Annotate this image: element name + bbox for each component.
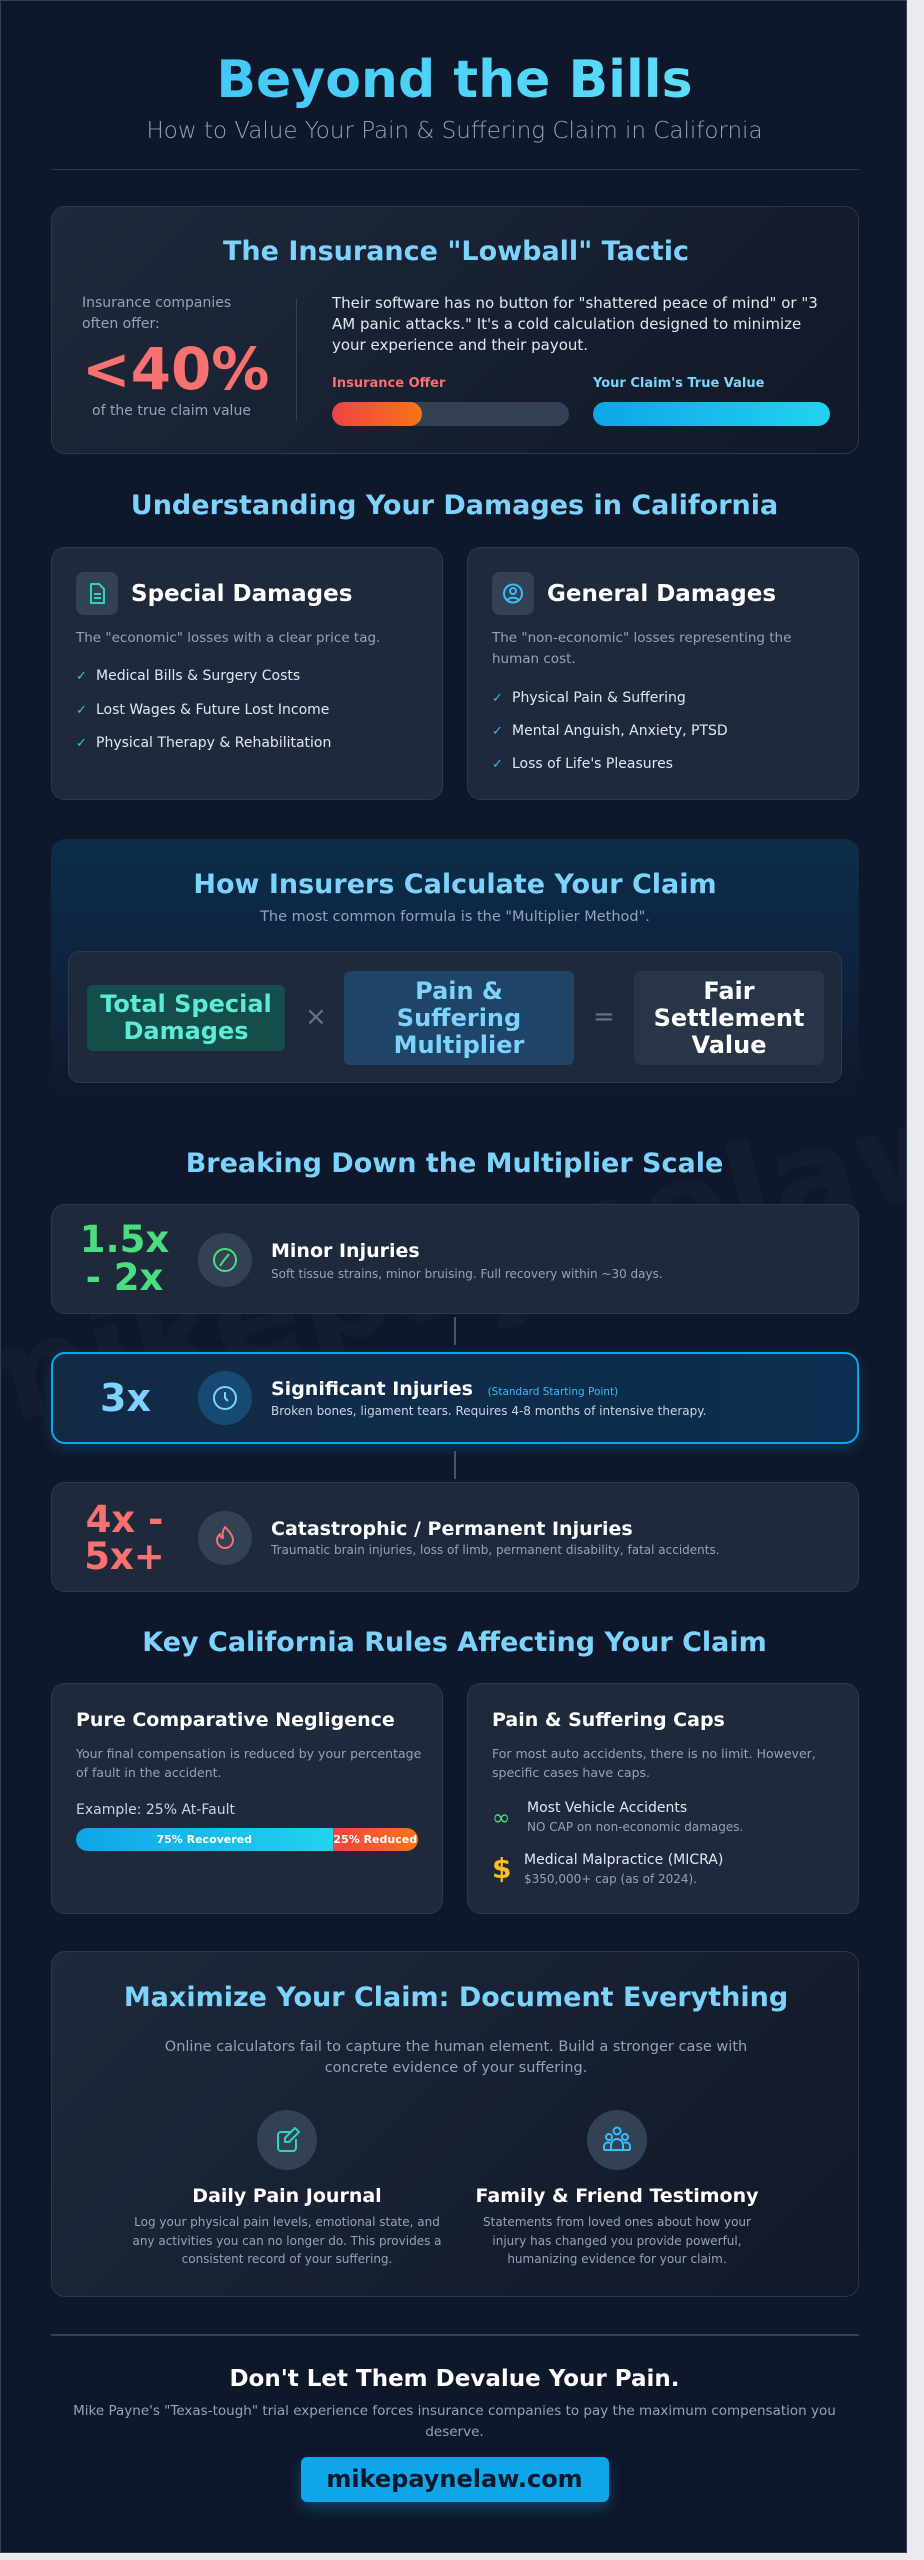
list: ✓	[76, 736, 87, 751]
panel: general damages: The "non-economic" losses representing the human cost.	[492, 630, 791, 667]
panel: document everything	[51, 1951, 859, 2297]
list: Physical Pain & Suffering	[512, 690, 686, 706]
panel: caps	[467, 1683, 859, 1914]
bar: insurance offer	[332, 376, 569, 426]
icon: clock	[198, 1371, 252, 1425]
row: minor: - 2x	[86, 1256, 163, 1299]
heading: How Insurers Calculate Your Claim	[193, 869, 717, 900]
footer: call to action: Don't Let Them Devalue Your Pain.	[229, 2366, 680, 2392]
stat: <40%: <40%	[82, 335, 269, 403]
panel: comparative negligence: Example: 25% At-Fault	[76, 1802, 235, 1818]
item: MICRA: $350,000+ cap (as of 2024).	[524, 1872, 697, 1886]
title: Special Damages	[131, 581, 352, 607]
title: Beyond the Bills	[216, 50, 693, 110]
formula: =	[593, 1002, 615, 1032]
bar: insurance offer: Insurance Offer	[332, 376, 445, 391]
list: ✓	[492, 691, 503, 706]
icon: leaf	[198, 1233, 252, 1287]
box: multiplier	[344, 971, 574, 1065]
list: ✓	[492, 724, 503, 739]
stat: <40%: Insurance companies	[82, 295, 231, 311]
list: Mental Anguish, Anxiety, PTSD	[512, 723, 728, 739]
row: catastrophic: 5x+	[84, 1535, 165, 1578]
row: minor: 1.5x	[80, 1218, 169, 1261]
box: multiplier: Multiplier	[394, 1031, 524, 1059]
box: multiplier: Suffering	[397, 1004, 521, 1032]
heading: lowball: The Insurance "Lowball" Tactic	[223, 236, 689, 267]
panel: lowball tactic	[51, 206, 859, 454]
row: minor: Soft tissue strains, minor bruising. Full recovery within ~30 days.	[271, 1267, 663, 1281]
panel: document everything: Online calculators fail to capture the human element. Build a stronger case with concrete evidence of your suffering.	[165, 2039, 747, 2076]
icon: document	[76, 572, 118, 615]
list: Lost Wages & Future Lost Income	[96, 702, 329, 718]
button: mikepaynelaw.com	[326, 2465, 583, 2493]
button	[300, 2457, 608, 2502]
panel: document everything: Maximize Your Claim: Document Everything	[124, 1982, 788, 2013]
item: journal: Log your physical pain levels, emotional state, and any activities you can no longer do. This provides a consistent record of your suffering.	[132, 2215, 442, 2266]
row: significant	[51, 1352, 859, 1444]
footer: call to action: Mike Payne's "Texas-tough" trial experience forces insurance companies to pay the maximum compensation you deserve.	[73, 2403, 836, 2440]
list: ✓	[76, 669, 87, 684]
list	[76, 668, 331, 751]
panel: caps: For most auto accidents, there is no limit. However, specific cases have caps.	[492, 1746, 816, 1780]
bar: negligence: 75% Recovered	[156, 1833, 252, 1846]
row: significant: Significant Injuries (Standard Starting Point)	[271, 1378, 618, 1400]
icon: flame	[198, 1511, 252, 1565]
item: no cap	[492, 1800, 743, 1834]
panel: calculation: The most common formula is the "Multiplier Method".	[260, 909, 650, 925]
row: significant: 3x	[100, 1376, 151, 1420]
formula	[68, 951, 842, 1083]
item: testimony	[476, 2110, 758, 2266]
title	[1, 49, 908, 111]
item: no cap: ∞	[492, 1806, 510, 1831]
box: fair settlement: Value	[691, 1031, 767, 1059]
item: MICRA: $	[492, 1852, 511, 1885]
panel: special damages	[51, 547, 443, 800]
formula: ×	[305, 1002, 327, 1032]
bar: negligence	[76, 1828, 418, 1851]
heading: damages: Understanding Your Damages in California	[131, 490, 778, 521]
stat: <40%: of the true claim value	[92, 403, 251, 419]
list: ✓	[492, 757, 503, 772]
list: ✓	[76, 703, 87, 718]
panel: comparative negligence: Pure Comparative Negligence	[76, 1709, 395, 1731]
item: journal: Daily Pain Journal	[192, 2185, 382, 2207]
subtitle: How to Value Your Pain & Suffering Claim in California	[146, 118, 763, 144]
item: no cap: Most Vehicle Accidents	[527, 1800, 687, 1816]
item: MICRA: Medical Malpractice (MICRA)	[524, 1852, 723, 1868]
stat: <40%: often offer:	[82, 316, 160, 332]
list: Physical Therapy & Rehabilitation	[96, 735, 331, 751]
bar: true value: Your Claim's True Value	[593, 376, 764, 391]
title: General Damages	[547, 581, 776, 607]
row: catastrophic	[51, 1482, 859, 1592]
panel: caps: Pain & Suffering Caps	[492, 1709, 725, 1731]
panel: general damages	[467, 547, 859, 800]
item: MICRA	[492, 1852, 723, 1886]
footer: call to action	[73, 2366, 836, 2515]
panel: calculation	[51, 839, 859, 1101]
box: total special: Total Special Damages	[100, 990, 272, 1045]
row: minor	[51, 1204, 859, 1314]
row: minor: Minor Injuries	[271, 1240, 420, 1262]
box: fair settlement: Settlement	[654, 1004, 804, 1032]
row: catastrophic: 4x -	[86, 1498, 163, 1541]
item: testimony: Family & Friend Testimony	[476, 2185, 758, 2207]
item: testimony: Statements from loved ones about how your injury has changed you provide powerful, humanizing evidence for your claim.	[483, 2215, 751, 2266]
panel: special damages: The "economic" losses with a clear price tag.	[76, 630, 380, 646]
row: catastrophic: Traumatic brain injuries, loss of limb, permanent disability, fatal accidents.	[271, 1543, 720, 1557]
bar: true value	[592, 376, 830, 426]
stat: <40%	[82, 295, 269, 419]
heading: key rules: Key California Rules Affecting Your Claim	[142, 1627, 767, 1658]
panel: comparative negligence	[51, 1683, 443, 1914]
icon: person	[492, 572, 534, 615]
row: catastrophic: Catastrophic / Permanent Injuries	[271, 1518, 633, 1540]
bar: negligence: 25% Reduced	[333, 1833, 417, 1846]
box: fair settlement: Fair	[703, 977, 755, 1005]
box: multiplier: Pain &	[415, 977, 503, 1005]
list: Loss of Life's Pleasures	[512, 756, 673, 772]
panel: comparative negligence: Your final compensation is reduced by your percentage of fault in the accident.	[76, 1746, 421, 1780]
heading: multiplier scale: Breaking Down the Multiplier Scale	[186, 1148, 723, 1179]
text: explanation: Their software has no button for "shattered peace of mind" or "3 AM panic attacks." It's a cold calculation designed to minimize your experience and their payout.	[332, 294, 818, 354]
list	[492, 690, 728, 772]
item: no cap: NO CAP on non-economic damages.	[527, 1820, 743, 1834]
box: fair settlement	[634, 971, 824, 1065]
row: significant: Broken bones, ligament tears. Requires 4-8 months of intensive therapy.	[271, 1404, 706, 1418]
list: Medical Bills & Surgery Costs	[96, 668, 300, 684]
item: journal	[132, 2110, 442, 2266]
